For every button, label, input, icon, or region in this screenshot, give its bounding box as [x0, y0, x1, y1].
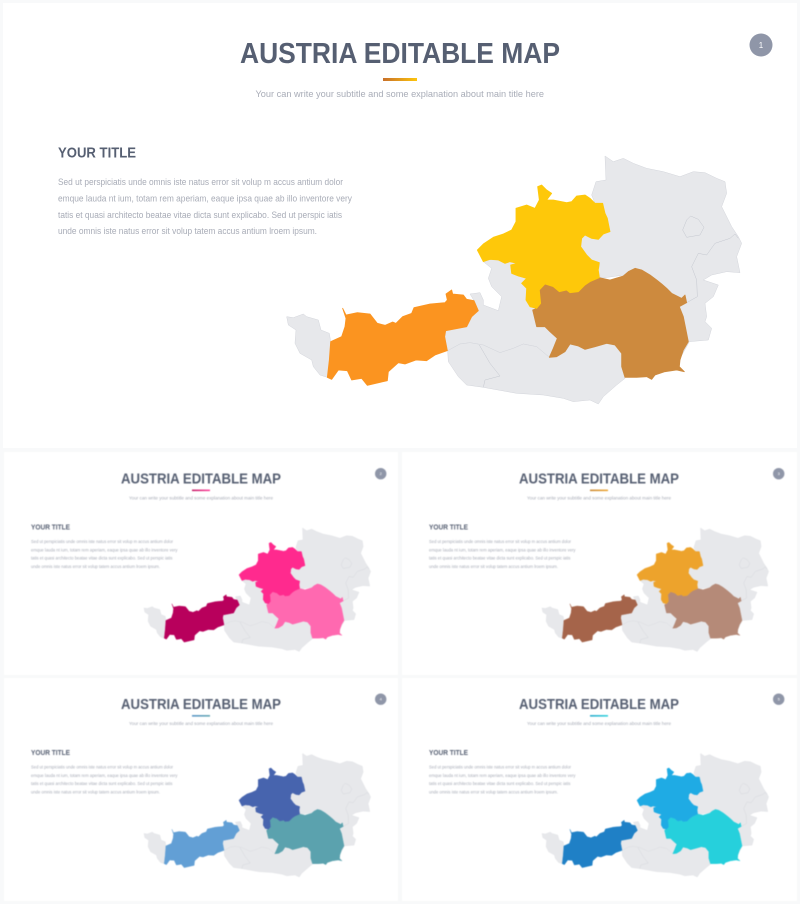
region: Tyrol	[562, 820, 637, 868]
map of Austria	[542, 753, 769, 877]
section heading: YOUR TITLE	[31, 748, 70, 757]
body text: Sed ut perspiciatis unde omnis iste natus error sit volup m accus antium dolor	[429, 539, 571, 544]
page number badge: 4	[380, 697, 383, 702]
page number badge	[750, 34, 772, 56]
region: Upper Austria	[239, 768, 305, 829]
subtitle: Your can write your subtitle and some explanation about main title here	[256, 89, 544, 100]
subtitle: Your can write your subtitle and some explanation about main title here	[129, 721, 273, 727]
region: Styria	[267, 809, 344, 865]
region: Styria	[533, 268, 688, 379]
title underline	[590, 715, 608, 717]
body text: Sed ut perspiciatis unde omnis iste natus error sit volup m accus antium dolor	[429, 765, 571, 770]
title: AUSTRIA EDITABLE MAP	[121, 697, 281, 713]
map of Austria	[144, 753, 371, 877]
region: Upper Austria	[477, 185, 610, 308]
subtitle: Your can write your subtitle and some explanation about main title here	[527, 721, 671, 727]
panel: pink variant	[4, 452, 398, 675]
page number badge: 2	[380, 471, 383, 476]
body text: emque lauda nt ium, totam rem aperiam, eaque ipsa quae ab illo inventore very	[58, 194, 352, 204]
body text: emque lauda nt ium, totam rem aperiam, eaque ipsa quae ab illo inventore very	[429, 547, 576, 552]
body text: tatis et quasi architecto beatae vitae dicta sunt explicabo. Sed ut perspic iatis	[58, 210, 342, 220]
region: Styria	[665, 584, 742, 639]
region: Styria	[267, 584, 344, 639]
region: Upper Austria	[239, 542, 305, 604]
title underline	[192, 715, 210, 717]
page number badge: 1	[759, 41, 764, 50]
body text: tatis et quasi architecto beatae vitae dicta sunt explicabo. Sed ut perspic iatis	[429, 781, 571, 786]
page number badge	[773, 694, 784, 705]
panel: brown variant	[402, 452, 797, 675]
page number badge	[773, 468, 784, 479]
region: Tyrol	[327, 290, 478, 385]
region: Styria	[665, 809, 742, 865]
body text: unde omnis iste natus error sit volup tatem accus antium lroem ipsum.	[31, 564, 160, 569]
region: Upper Austria	[637, 542, 703, 604]
body text: Sed ut perspiciatis unde omnis iste natus error sit volup m accus antium dolor	[31, 539, 173, 544]
page number badge: 5	[778, 697, 781, 702]
body text: emque lauda nt ium, totam rem aperiam, eaque ipsa quae ab illo inventore very	[429, 773, 576, 778]
title: AUSTRIA EDITABLE MAP	[240, 38, 560, 70]
body text: unde omnis iste natus error sit volup tatem accus antium lroem ipsum.	[429, 564, 558, 569]
body text: tatis et quasi architecto beatae vitae dicta sunt explicabo. Sed ut perspic iatis	[429, 556, 571, 561]
body text	[58, 177, 352, 236]
panel: cyan variant	[402, 678, 797, 901]
region: Tyrol	[164, 595, 239, 642]
section heading: YOUR TITLE	[31, 523, 70, 532]
title underline	[383, 78, 417, 81]
body text	[429, 765, 576, 794]
region: Upper Austria	[637, 768, 703, 829]
title underline	[192, 490, 210, 491]
body text: Sed ut perspiciatis unde omnis iste natus error sit volup m accus antium dolor	[58, 177, 343, 187]
body text: emque lauda nt ium, totam rem aperiam, eaque ipsa quae ab illo inventore very	[31, 547, 178, 552]
page number badge	[375, 468, 386, 479]
body text	[31, 539, 178, 569]
title: AUSTRIA EDITABLE MAP	[519, 471, 679, 487]
title: AUSTRIA EDITABLE MAP	[519, 697, 679, 713]
section heading: YOUR TITLE	[429, 748, 468, 757]
body text: unde omnis iste natus error sit volup tatem accus antium lroem ipsum.	[31, 789, 160, 794]
page number badge: 3	[778, 471, 781, 476]
title: AUSTRIA EDITABLE MAP	[121, 471, 281, 487]
body text: emque lauda nt ium, totam rem aperiam, eaque ipsa quae ab illo inventore very	[31, 773, 178, 778]
map of Austria	[542, 528, 769, 651]
region: Tyrol	[164, 820, 239, 868]
body text: tatis et quasi architecto beatae vitae dicta sunt explicabo. Sed ut perspic iatis	[31, 781, 173, 786]
title underline	[590, 490, 608, 491]
body text: unde omnis iste natus error sit volup tatem accus antium lroem ipsum.	[429, 789, 558, 794]
page number badge	[375, 694, 386, 705]
body text: Sed ut perspiciatis unde omnis iste natus error sit volup m accus antium dolor	[31, 765, 173, 770]
map of Austria	[287, 156, 742, 404]
map of Austria	[144, 528, 371, 651]
body text	[31, 765, 178, 794]
body text: unde omnis iste natus error sit volup tatem accus antium lroem ipsum.	[58, 226, 317, 236]
panel: blue-teal variant	[4, 678, 398, 901]
section heading: YOUR TITLE	[58, 144, 136, 162]
subtitle: Your can write your subtitle and some explanation about main title here	[129, 495, 273, 501]
body text	[429, 539, 576, 569]
section heading: YOUR TITLE	[429, 523, 468, 532]
body text: tatis et quasi architecto beatae vitae dicta sunt explicabo. Sed ut perspic iatis	[31, 556, 173, 561]
region: Tyrol	[562, 595, 637, 642]
subtitle: Your can write your subtitle and some explanation about main title here	[527, 495, 671, 501]
panel: main slide	[3, 3, 797, 448]
